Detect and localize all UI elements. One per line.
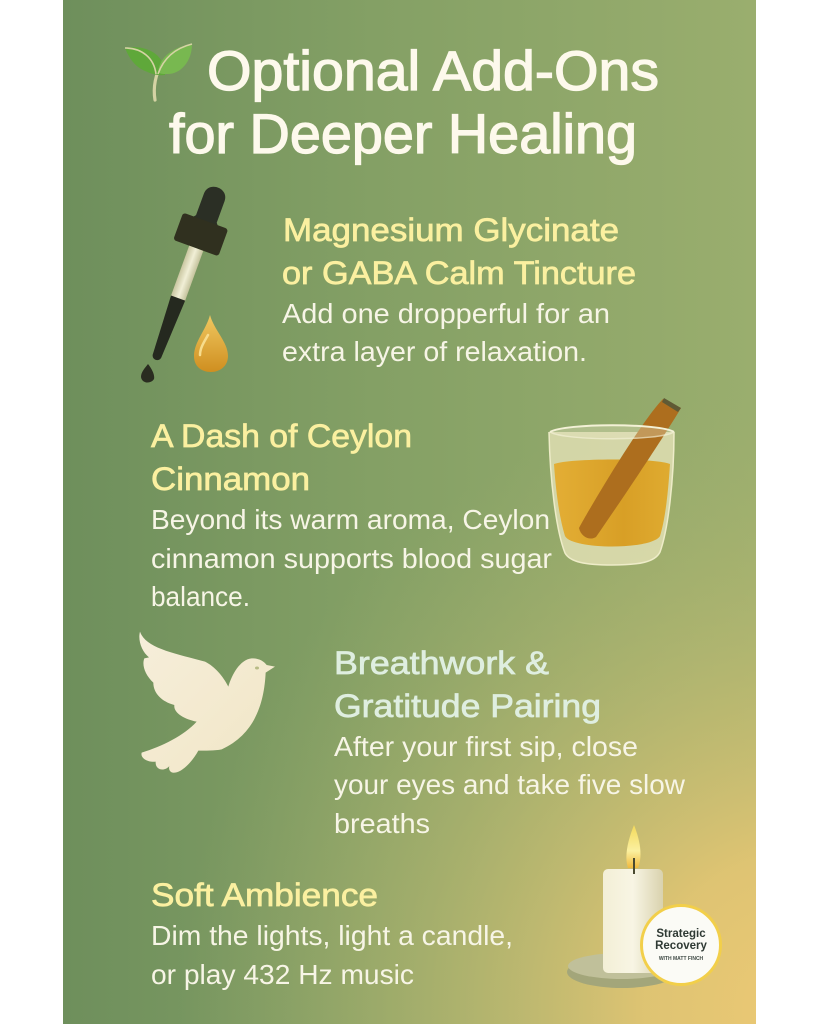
icon: candle on saucer — [567, 825, 677, 988]
section: magnesium tincture: extra layer of relaxation. — [282, 336, 587, 367]
icon: glass with cinnamon stick — [549, 398, 681, 565]
section: breathwork and gratitude — [334, 645, 686, 839]
badge: strategic recovery logo — [642, 906, 720, 984]
icon: sprout — [125, 44, 192, 100]
icon: dropper — [133, 179, 240, 383]
section: breathwork and gratitude: breaths — [334, 808, 430, 839]
section: magnesium tincture: or GABA Calm Tincture — [282, 255, 636, 291]
section: ceylon cinnamon — [151, 418, 552, 612]
title: for Deeper Healing — [169, 102, 637, 165]
section: soft ambience — [151, 877, 513, 990]
section: breathwork and gratitude: Gratitude Pairing — [334, 688, 601, 724]
badge: strategic recovery logo: WITH MATT FINCH — [659, 956, 704, 962]
badge: strategic recovery logo: Recovery — [655, 940, 707, 952]
section: ceylon cinnamon: cinnamon supports blood sugar — [151, 543, 552, 574]
section: soft ambience: or play 432 Hz music — [151, 959, 414, 990]
section: magnesium tincture: Magnesium Glycinate — [283, 212, 619, 248]
section: breathwork and gratitude: Breathwork & — [334, 645, 549, 681]
badge: strategic recovery logo: Strategic — [656, 928, 706, 940]
section: soft ambience: Soft Ambience — [151, 877, 378, 913]
section: ceylon cinnamon: Cinnamon — [151, 461, 310, 497]
section: breathwork and gratitude: your eyes and take five slow — [334, 769, 686, 800]
section: ceylon cinnamon: A Dash of Ceylon — [151, 418, 412, 454]
section: soft ambience: Dim the lights, light a candle, — [151, 920, 513, 951]
icon: dove — [139, 632, 275, 773]
section: magnesium tincture — [282, 212, 636, 367]
section: magnesium tincture: Add one dropperful for an — [282, 298, 610, 329]
section: breathwork and gratitude: After your first sip, close — [334, 731, 638, 762]
title: Optional Add-Ons — [207, 39, 659, 102]
section: ceylon cinnamon: Beyond its warm aroma, Ceylon — [151, 504, 550, 535]
title — [169, 39, 659, 165]
section: ceylon cinnamon: balance. — [151, 581, 250, 612]
